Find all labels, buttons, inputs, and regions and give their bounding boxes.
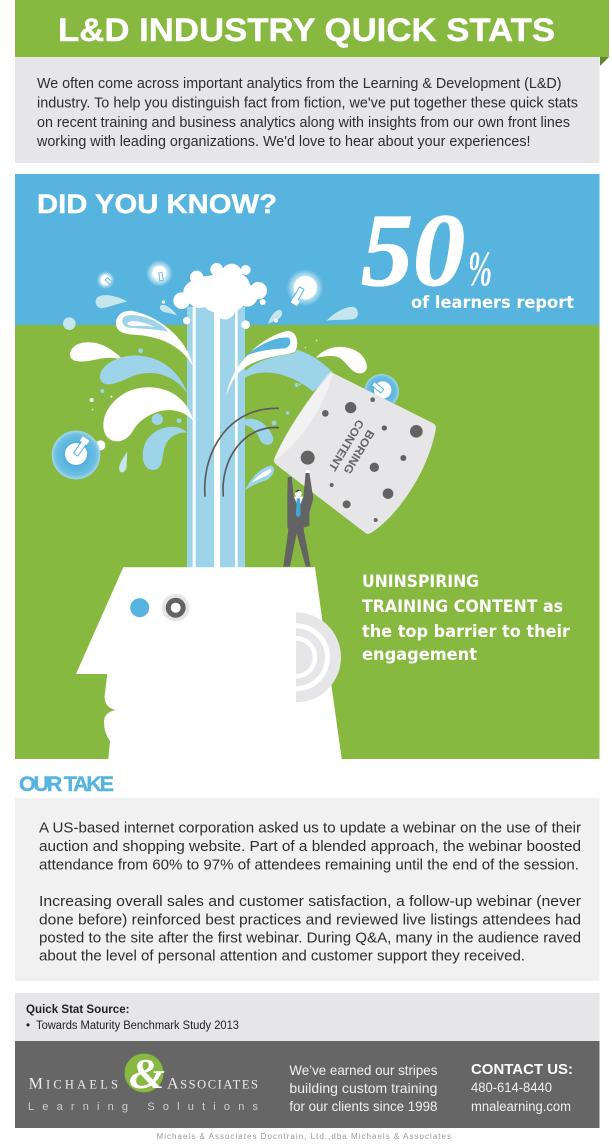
contact (471, 1061, 573, 1114)
heading: our take: OUR TAKE (19, 772, 114, 796)
our take text: posted to the site after the first webinar. During Q&A, many in the audience raved (39, 930, 581, 946)
splash: right side (226, 331, 367, 491)
callout text: the top barrier to their (362, 622, 571, 641)
icon: light bulb top (146, 260, 173, 287)
panel: intro (15, 57, 600, 163)
icon: light bulb top right (286, 269, 324, 306)
logo: & (129, 1052, 165, 1098)
callout text (362, 572, 571, 664)
intro text: working with leading organizations. We'd love to hear about your experiences! (36, 134, 530, 150)
splash: left side (70, 311, 193, 472)
icon: light bulb small left (97, 271, 115, 289)
our take text: done before) reinforced best practices and reviewed live listings attendees had (39, 912, 581, 928)
arcs (205, 408, 279, 497)
droplets over the sky (63, 295, 358, 330)
illustration: head (76, 567, 342, 759)
intro text: on recent training and business analytics along with insights from our own front lines (37, 115, 570, 131)
our take text: about the level of personal attention and customer support they received. (39, 948, 525, 964)
copyright line: Michaels & Associates Docntrain, Ltd.,dba Michaels & Associates (156, 1132, 451, 1141)
intro text (36, 76, 578, 150)
eye: ring (162, 594, 190, 622)
stat: 50 percent: 50 (361, 193, 465, 308)
tagline: We’ve earned our stripes (289, 1062, 437, 1078)
callout text: TRAINING CONTENT as (362, 597, 563, 616)
logo: M ICHAELS (29, 1076, 118, 1093)
icon: light bulb behind bucket (364, 374, 399, 409)
source item: Towards Maturity Benchmark Study 2013 (36, 1020, 239, 1032)
our take text (39, 820, 581, 964)
our take text: auction and shopping website. Part of a blended approach, the webinar boosted (39, 839, 581, 855)
bucket label: CONTENT (326, 417, 365, 473)
icon: light bulb left (52, 431, 100, 479)
contact: mnalearning.com (471, 1099, 571, 1114)
header banner (15, 0, 609, 66)
contact: CONTACT US: (471, 1061, 573, 1078)
panel: did you know (15, 174, 600, 759)
our take text: A US-based internet corporation asked us to update a webinar on the use of their (39, 820, 581, 836)
bucket (274, 372, 436, 534)
callout text: UNINSPIRING (362, 572, 479, 591)
eye: blue dot (130, 598, 149, 617)
tagline: building custom training (289, 1080, 437, 1096)
callout text: engagement (362, 645, 477, 664)
panel: our take (15, 798, 600, 981)
illustration: fountain (52, 260, 436, 570)
foam cloud (162, 263, 278, 329)
our take text: attendance from 60% to 97% of attendees remaining until the end of the session. (39, 858, 579, 874)
water column (187, 307, 245, 570)
intro text: industry. To help you distinguish fact from fiction, we've put together these quick stats (37, 96, 578, 112)
logo (28, 1052, 258, 1113)
our take text: Increasing overall sales and customer satisfaction, a follow-up webinar (never (39, 894, 581, 910)
tagline (289, 1062, 438, 1114)
stat caption: of learners report (411, 293, 574, 313)
tagline: for our clients since 1998 (289, 1098, 438, 1114)
source item: • (26, 1020, 30, 1032)
source heading: Quick Stat Source: (26, 1004, 130, 1016)
stat: 50 percent: % (468, 240, 492, 296)
title: L&D INDUSTRY QUICK STATS (58, 12, 555, 48)
bucket label: BORING (340, 427, 376, 476)
intro text: We often come across important analytics from the Learning & Development (L&D) (37, 76, 562, 92)
panel: source (15, 993, 600, 1041)
heading: did you know: DID YOU KNOW? (37, 189, 277, 219)
logo: ASSOCIATES (167, 1076, 258, 1093)
figure: businessman (283, 470, 313, 567)
bucket label (326, 417, 376, 476)
logo: Learning Solutions (28, 1101, 258, 1113)
panel: footer (15, 1041, 600, 1128)
ear (296, 612, 341, 702)
contact: 480-614-8440 (471, 1080, 552, 1095)
